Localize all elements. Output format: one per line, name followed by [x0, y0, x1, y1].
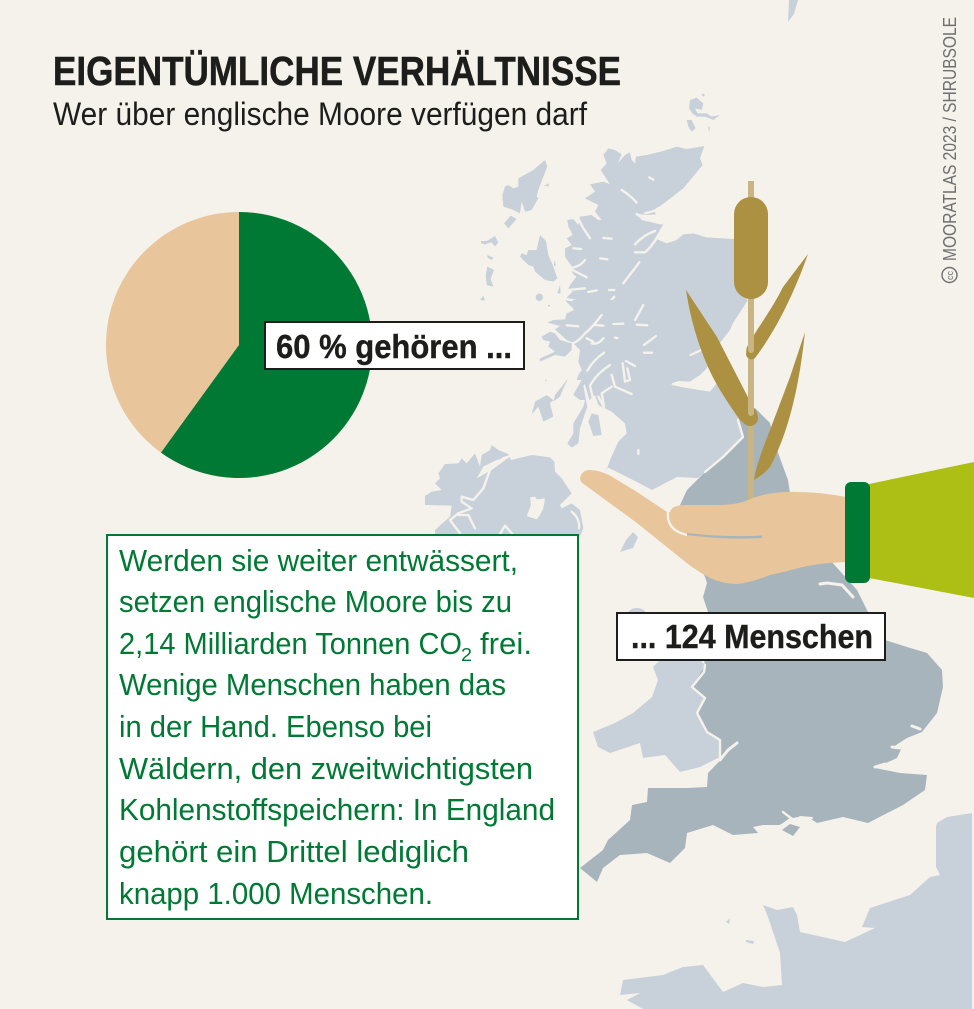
text box: knapp 1.000 Menschen. — [119, 877, 433, 911]
map: Wales — [593, 660, 720, 772]
map: Orkney — [687, 94, 720, 133]
map: Mull — [540, 332, 572, 362]
text box: gehört ein Drittel lediglich — [119, 835, 469, 869]
map: Hebrides — [480, 160, 561, 307]
text box: Wäldern, den zweitwichtigsten — [119, 752, 533, 786]
text box: 2,14 Milliarden Tonnen CO — [119, 627, 462, 661]
map: borders and inlets — [692, 420, 920, 826]
map: Channel Islands — [726, 918, 754, 944]
text box: 2 — [461, 645, 472, 665]
map: Shetland — [788, 0, 798, 22]
label: 124 people: ... 124 Menschen — [631, 618, 873, 655]
icon: reed plant — [686, 181, 808, 501]
text box — [107, 535, 578, 919]
map: Islay and Jura — [532, 395, 553, 422]
credit line: cc — [945, 270, 955, 280]
map: Isle of Wight — [782, 824, 800, 836]
text box: frei. — [480, 627, 532, 661]
map: southern lochs — [567, 305, 703, 454]
icon: sleeve — [869, 462, 974, 598]
map: Arran — [588, 413, 602, 436]
map: Scotland north — [565, 146, 750, 315]
text box: setzen englische Moore bis zu — [119, 585, 512, 619]
text box: Wenige Menschen haben das — [119, 668, 506, 702]
icon: open hand — [580, 470, 846, 584]
map: Firth of Forth — [672, 357, 737, 397]
subtitle: Wer über englische Moore verfügen darf — [53, 96, 587, 132]
text box: Kohlenstoffspeichern: In England — [119, 793, 555, 827]
map: Isle of Man — [620, 532, 638, 552]
map: Scotland south — [532, 300, 755, 490]
map: northern lochs — [567, 177, 662, 315]
map: France coast — [620, 813, 972, 1009]
map: Isle of Anglesey — [628, 608, 646, 620]
label: 60 percent: 60 % gehören ... — [276, 328, 512, 365]
map: England — [580, 408, 943, 882]
map: British Isles and northern France — [425, 0, 972, 1009]
map: Irish border and loughs — [450, 457, 579, 537]
title: EIGENTÜMLICHE VERHÄLTNISSE — [53, 48, 621, 94]
text box: Werden sie weiter entwässert, — [119, 544, 518, 578]
pie chart: 60 percent — [106, 212, 372, 478]
text box: in der Hand. Ebenso bei — [119, 710, 432, 744]
map: Ireland — [425, 445, 583, 540]
icon: green cuff — [845, 482, 870, 583]
